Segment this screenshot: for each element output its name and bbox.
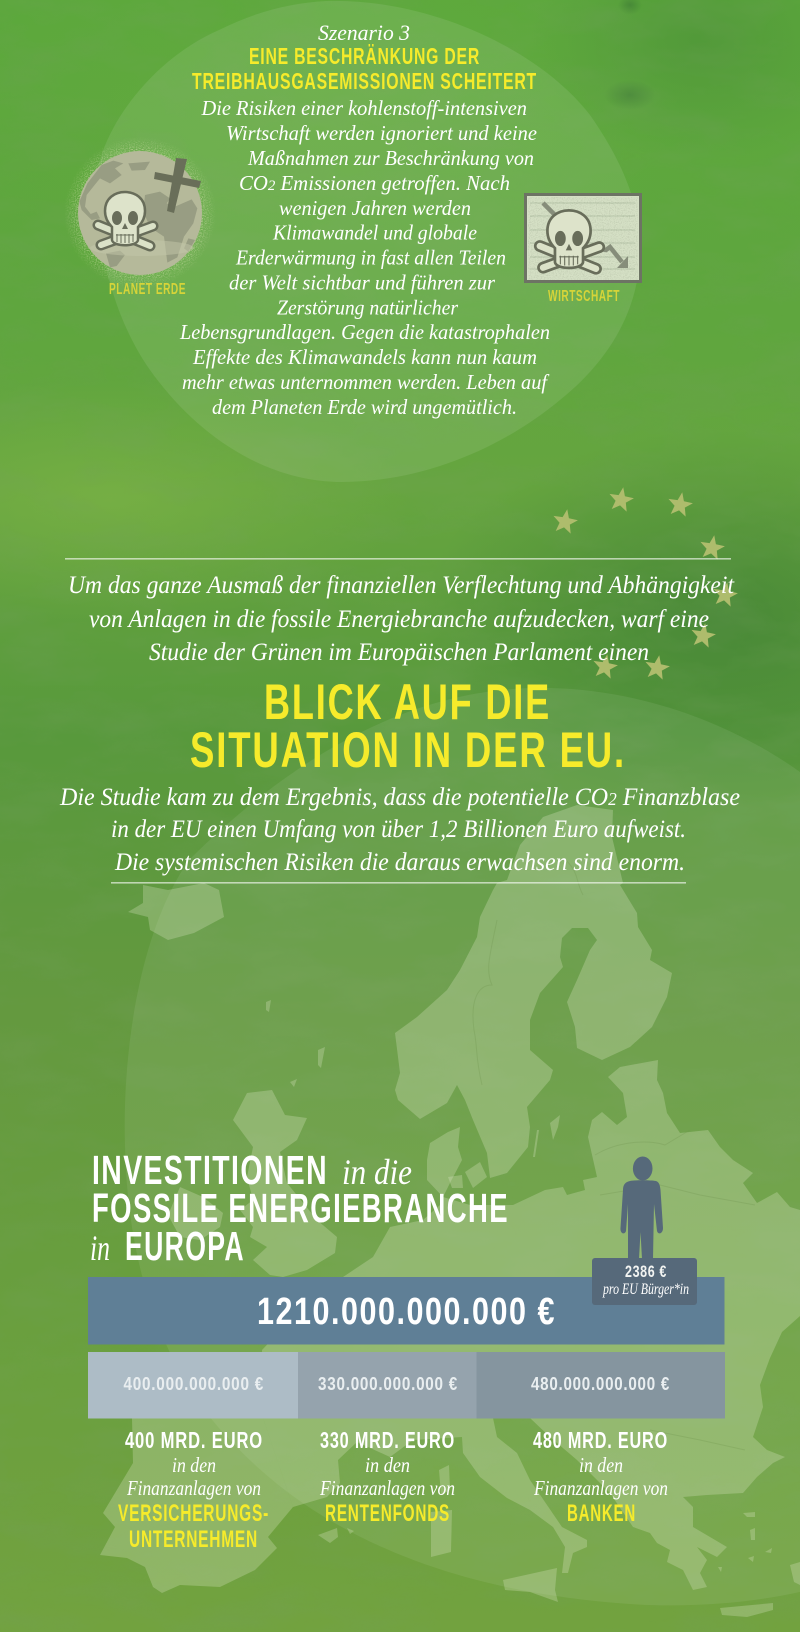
text block: scenario description: Effekte des Klimawandels kann nun kaum [192,345,537,369]
text block: scenario description: dem Planeten Erde wird ungemütlich. [212,395,517,419]
tag: per citizen amount: pro EU Bürger*in [602,1281,689,1298]
text block: scenario description: Wirtschaft werden ignoriert und keine [226,121,537,145]
map: crete [720,1603,773,1617]
bar segment: insurers [88,1352,298,1418]
chart frame [526,194,640,282]
column: banken: 480 MRD. EURO [533,1427,668,1453]
column: rentenfonds: 330 MRD. EURO [320,1427,455,1453]
bar: total investment [88,1277,724,1344]
text block: scenario description: Erderwärmung in fast allen Teilen [235,246,506,270]
text block: study introduction: von Anlagen in die fossile Energiebranche aufzudecken, warf eine [89,606,709,633]
text block: scenario description [179,96,550,419]
column: banken: BANKEN [567,1500,636,1527]
map: aegean islands [718,1512,800,1585]
globe lighter wash [90,240,194,256]
speckled halo around globe [64,137,216,289]
heading: blick auf die situation in der eu: BLICK AUF DIE [264,674,551,730]
bar segment: pension funds [298,1352,476,1418]
column: versicherungsunternehmen [118,1427,269,1553]
text block: scenario description: Die Risiken einer kohlenstoff-intensiven [201,96,527,120]
translucent europe disc [125,688,800,1605]
column: versicherungsunternehmen: 400 MRD. EURO [125,1427,263,1453]
map: iceland [128,883,224,940]
text block: study introduction: Um das ganze Ausmaß der finanziellen Verflechtung und Abhängigkeit [68,572,735,599]
text block: scenario description: Maßnahmen zur Beschränkung von [247,146,534,170]
column: versicherungsunternehmen: VERSICHERUNGS- [118,1500,269,1527]
map: great britain [233,1090,337,1277]
heading: blick auf die situation in der eu [190,674,626,778]
map: gotland and oeland [533,1115,560,1157]
text block: scenario description: wenigen Jahren werden [279,196,471,220]
bar segment: banks: 480.000.000.000 € [531,1374,670,1394]
icon: skull and crossbones [540,210,599,269]
panel: translucent scenario blob [97,1,640,482]
column: banken: Finanzanlagen von [533,1476,668,1500]
column: versicherungsunternehmen: in den [172,1453,216,1477]
text block: study result [59,784,740,876]
stars: eu star circle [551,485,739,680]
map: iberia [100,1418,293,1593]
label: planet erde: PLANET ERDE [109,281,186,298]
icon: skull and crossbones [98,192,153,246]
tag: per citizen amount: 2386 € [625,1262,667,1281]
heading: investitionen in die fossile energiebranche in europa: EUROPA [125,1223,245,1269]
heading: blick auf die situation in der eu: SITUATION IN DER EU. [190,722,626,778]
column: rentenfonds: Finanzanlagen von [319,1476,455,1500]
illustration: collapsing economy chart [526,194,640,282]
column: versicherungsunternehmen: Finanzanlagen von [126,1476,261,1500]
text block: study result: Die systemischen Risiken die daraus erwachsen sind enorm. [114,849,685,876]
heading: investitionen in die fossile energiebranche in europa: INVESTITIONEN [92,1147,328,1193]
falling arrow head [617,256,628,268]
text block: study introduction: Studie der Grünen im Europäischen Parlament einen [149,639,649,666]
map: national borders [473,860,755,1450]
icon: person silhouette [620,1156,663,1259]
heading: investitionen in die fossile energiebranche in europa [90,1147,509,1269]
text: scenario kicker: Szenario 3 [318,20,410,45]
map: scandinavia and finland [395,805,672,1178]
column: rentenfonds: in den [365,1453,410,1477]
bar segment: insurers: 400.000.000.000 € [124,1374,264,1394]
falling chart arrow [543,203,622,262]
heading: scenario title: EINE BESCHRÄNKUNG DER [249,43,480,69]
map: small northern islands [266,1000,325,1087]
text block: scenario description: Klimawandel und globale [272,220,477,244]
text block: scenario description: Lebensgrundlagen. Gegen die katastrophalen [179,320,550,344]
globe continents [79,161,197,267]
column: rentenfonds: RENTENFONDS [325,1500,450,1527]
bar segment: pension funds: 330.000.000.000 € [318,1374,458,1394]
chart paper speckles [528,197,638,280]
chart grid lines [530,203,635,269]
illustration: dead planet earth [64,137,216,289]
column: versicherungsunternehmen: UNTERNEHMEN [129,1526,258,1553]
text block: study result: Die Studie kam zu dem Ergebnis, dass die potentielle CO2 Finanzblase [59,784,740,811]
bar segment: banks [476,1352,725,1418]
text block: study result: in der EU einen Umfang von über 1,2 Billionen Euro aufweist. [111,816,686,843]
map: corsica [439,1465,450,1495]
globe disc [78,151,202,275]
map: continental europe [262,1060,800,1590]
icon: cross on globe [154,158,201,213]
text block: scenario description: der Welt sichtbar und führen zur [229,270,496,294]
total amount: 1210.000.000.000 € [257,1291,556,1333]
heading: investitionen in die fossile energiebranche in europa: in [90,1228,110,1268]
heading: investitionen in die fossile energiebranche in europa: FOSSILE ENERGIEBRANCHE [92,1185,509,1231]
text block: scenario description: CO2 Emissionen getroffen. Nach [239,171,510,195]
map: sardinia [431,1510,452,1557]
text block: study introduction [68,572,735,666]
column: rentenfonds [319,1427,455,1527]
column: banken [533,1427,668,1527]
tag: per citizen amount [592,1258,697,1305]
map: balearic islands [318,1528,354,1543]
text block: scenario description: mehr etwas unternommen werden. Leben auf [182,370,550,394]
heading: investitionen in die fossile energiebranche in europa: in die [342,1152,412,1192]
heading: scenario title: TREIBHAUSGASEMISSIONEN SCHEITERT [192,68,537,94]
map: jutland [427,1127,462,1197]
label: wirtschaft: WIRTSCHAFT [548,288,620,305]
column: banken: in den [579,1453,623,1477]
heading: scenario title [192,43,537,94]
map: ireland [168,1187,223,1240]
map: danish islands [448,1162,487,1188]
map: sicily [503,1568,558,1602]
map of europe [100,805,800,1617]
text block: scenario description: Zerstörung natürlicher [277,296,459,320]
